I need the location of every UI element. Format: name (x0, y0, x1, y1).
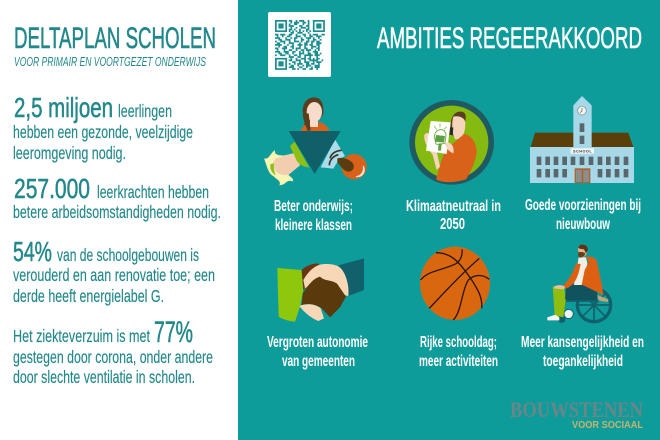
logo: bouwstenen voor sociaal: VOOR SOCIAAL (572, 420, 643, 431)
icon: three people around triangle (264, 97, 367, 185)
label: Vergroten autonomie (267, 334, 368, 351)
label (419, 334, 498, 370)
panel: school facts (13, 22, 221, 387)
label (525, 197, 641, 233)
item: meer kansengelijkheid (521, 245, 644, 370)
fact: 54% (13, 236, 215, 306)
label (274, 198, 353, 234)
fact: 257.000: betere arbeidsomstandigheden nodig. (13, 202, 221, 222)
icon: person in wheelchair (547, 245, 611, 323)
icon: handshake (277, 258, 364, 322)
fact: 257.000 (13, 173, 221, 222)
label (267, 334, 368, 370)
label (406, 198, 501, 233)
label: Rijke schooldag; (420, 334, 497, 351)
logo: bouwstenen voor sociaal (510, 397, 643, 431)
fact: 2,5 miljoen: leeromgeving nodig. (13, 143, 126, 163)
fact: 54%: van de schoolgebouwen is (57, 245, 199, 265)
item: goede voorzieningen (525, 96, 641, 233)
icon: school building: SCHOOL (573, 149, 592, 153)
label: nieuwbouw (556, 216, 611, 233)
fact: 2,5 miljoen (13, 92, 193, 163)
fact: 54%: derde heeft energielabel G. (13, 286, 164, 306)
item: klimaatneutraal (406, 100, 501, 233)
fact: 77%: Het ziekteverzuim is met (13, 326, 150, 346)
item: rijke schooldag (419, 247, 498, 370)
fact: 77%: door slechte ventilatie in scholen. (13, 367, 195, 387)
label: Klimaatneutraal in (406, 198, 501, 215)
label: Beter onderwijs; (274, 198, 353, 215)
QR code (268, 12, 331, 77)
label: meer activiteiten (419, 353, 498, 370)
fact: 2,5 miljoen: 2,5 miljoen (14, 92, 113, 123)
fact: 257.000: 257.000 (14, 173, 90, 204)
panel: ambitions background (238, 0, 660, 440)
icon: person holding drawing in green circle (409, 100, 494, 185)
subtitle: VOOR PRIMAIR EN VOORTGEZET ONDERWIJS (14, 54, 206, 69)
label: 2050 (440, 216, 465, 233)
title: DELTAPLAN SCHOLEN (14, 22, 216, 55)
label: van gemeenten (282, 353, 355, 370)
fact: 54%: 54% (13, 236, 52, 267)
fact: 54%: verouderd en aan renovatie toe; een (13, 265, 215, 285)
fact: 77%: 77% (154, 316, 193, 349)
label: kleinere klassen (275, 217, 352, 234)
fact: 257.000: leerkrachten hebben (97, 182, 209, 202)
icon: basketball (420, 247, 490, 320)
item: beter onderwijs (264, 97, 367, 234)
fact: 77%: gestegen door corona, onder andere (13, 347, 213, 367)
item: vergroten autonomie (267, 258, 368, 370)
fact: 2,5 miljoen: leerlingen (118, 101, 172, 121)
fact: 77% (13, 316, 213, 387)
label (521, 334, 644, 370)
fact: 2,5 miljoen: hebben een gezonde, veelzijdige (13, 122, 193, 142)
